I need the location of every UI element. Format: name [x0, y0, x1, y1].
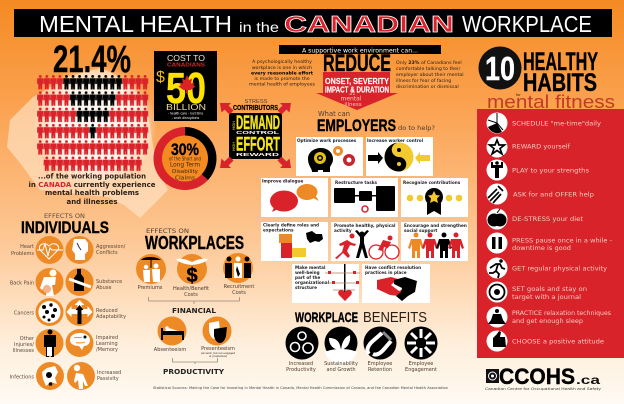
effect: aggression — [66, 236, 126, 264]
card: make mental well-being part of structure: structure — [295, 285, 317, 290]
cost box: 50 — [166, 64, 206, 113]
card: optimize work processes — [296, 137, 363, 176]
caption: working population — [28, 172, 156, 206]
reduce arrow: mental — [340, 96, 362, 102]
card: encourage social support: social support — [404, 228, 437, 233]
card: encourage social support — [401, 222, 468, 261]
caption: working population: mental health problems — [45, 189, 139, 197]
title banner — [14, 9, 612, 37]
caption: working population: ...of the working population — [38, 172, 146, 180]
text: only 23% of Canadians: illness for fear of facing — [396, 78, 451, 84]
benefit: employee engagement — [404, 326, 438, 373]
effect: cancers — [14, 298, 64, 326]
effect: substance abuse: Abuse — [96, 285, 111, 291]
habit 7: physical activity: GET regular physical activity — [512, 266, 607, 272]
effect: impaired learning: Learning — [96, 341, 118, 347]
cost box: $ — [156, 69, 165, 86]
card: make mental well-being part of structure: part of the — [295, 275, 320, 280]
stress contributors — [229, 99, 282, 159]
benefit: employee retention: Retention — [368, 367, 392, 373]
heading: effects on workplaces: WORKPLACES — [145, 233, 244, 253]
cost box: COST TO — [167, 54, 205, 63]
effect: increased passivity — [67, 362, 121, 390]
reduce arrow: illness — [344, 102, 362, 108]
heading: what can employers do to help: do to help? — [398, 125, 435, 132]
effect: cancers: Cancers — [14, 310, 34, 316]
habit 10: positive attitude: CHOOSE a positive attitude — [512, 338, 604, 346]
heading: effects on workplaces — [145, 227, 244, 253]
habit 8: set goals: SET goals and stay on — [512, 286, 587, 293]
card: restructure tasks: Restructure tasks — [335, 180, 378, 185]
heading bar: supportive environment — [279, 45, 441, 54]
text: psychologically healthy workplace: A psychologically healthy — [252, 59, 312, 65]
habit 4: ask for and offer help — [486, 184, 594, 204]
people pictogram — [37, 75, 148, 173]
title banner: MENTAL HEALTH — [39, 11, 232, 37]
habit 6: press pause — [486, 232, 612, 254]
heading: workplace benefits: BENEFITS — [363, 310, 427, 326]
heading: what can employers do to help: What can — [318, 110, 350, 118]
donut: 30% disability claims: Disability — [172, 169, 199, 175]
reduce arrow: ONSET, SEVERITY — [325, 77, 390, 86]
text: only 23% of Canadians — [396, 60, 464, 90]
card: promote healthy activity — [331, 222, 399, 261]
card: recognize contributions: Recognize contributions — [403, 180, 461, 185]
stress contributors: CONTRIBUTORS — [233, 103, 278, 112]
donut: 30% disability claims: Claims — [175, 176, 195, 182]
title banner: CANADIAN — [284, 11, 454, 37]
habit 9: practice relaxation — [486, 306, 611, 328]
panel: ten healthy habits heading: HABITS — [523, 69, 597, 97]
habit 8: set goals: target with a journal — [512, 294, 581, 301]
effect: other injuries: Injuries/ — [14, 342, 34, 348]
stress arrows — [220, 103, 291, 168]
workplace: presenteeism: or productive) — [209, 354, 227, 358]
reduce arrow: IMPACT & DURATION — [325, 86, 389, 94]
stress contributors: HIGH — [232, 121, 236, 130]
stress contributors: STRESS — [244, 99, 268, 105]
panel: habits list — [477, 109, 624, 358]
heading: effects on individuals: INDIVIDUALS — [21, 218, 109, 237]
caption: working population: and illnesses — [66, 198, 118, 206]
habit 4: ask for and offer help: ASK for and OFFER help — [513, 192, 594, 198]
workplace: health benefit costs: Costs — [184, 292, 198, 298]
habit 9: practice relaxation: and get enough sleep — [512, 318, 583, 325]
bracket: productivity — [163, 358, 225, 376]
cost box: CANADIANS — [167, 62, 206, 68]
card: clearly define roles: Clearly define roles and — [263, 222, 319, 228]
card: make mental well-being part of structure: organizational — [295, 280, 330, 285]
panel: ten healthy habits heading: for — [516, 93, 521, 97]
effect: increased passivity: Passivity — [97, 376, 119, 382]
reduce arrow: REDUCE — [323, 50, 391, 77]
heading: effects on individuals: EFFECTS ON — [44, 213, 85, 220]
heading: workplace benefits — [295, 309, 427, 326]
workplace: presenteeism: (at work, but not engaged — [201, 351, 235, 355]
bracket: productivity: PRODUCTIVITY — [163, 368, 225, 376]
title banner: in the — [239, 19, 279, 35]
text: only 23% of Canadians: comfortable talking to their — [396, 66, 460, 72]
card: increase worker control — [366, 137, 433, 176]
statistical sources: Statistical Sources: Making the Case for Investing in Mental Health in Canada, Mental Health Commission of Canada, and the Canadian Mental Health Association — [153, 386, 448, 390]
effect: increased passivity: Increased — [97, 370, 121, 376]
cost box: - health care - lost time — [168, 112, 203, 116]
stress contributors: EFFORT — [236, 134, 280, 156]
effect: reduced adaptability: Reduced — [96, 308, 118, 314]
effect: reduced adaptability: Adaptability — [96, 314, 126, 320]
text: only 23% of Canadians: Only 23% of Canadians feel — [396, 60, 462, 66]
bracket: financial — [148, 297, 240, 315]
benefit: sustainability and growth: and Growth — [326, 367, 356, 373]
reduce arrow — [316, 50, 398, 110]
effect: heart problems: Heart — [20, 244, 34, 250]
workplace: recruitment costs — [223, 253, 254, 296]
card: increase worker control: Increase worker control — [367, 138, 424, 143]
habit 2: reward yourself: REWARD yourself — [512, 144, 571, 150]
workplace: absenteeism: Absenteeism — [154, 347, 186, 353]
workplace: presenteeism: Presenteeism — [201, 346, 235, 352]
card: conflict resolution: practices in place — [365, 270, 407, 275]
card: optimize work processes: Optimize work processes — [297, 138, 357, 143]
workplace: premiums — [136, 254, 166, 291]
effect: infections — [10, 362, 64, 390]
benefit: employee engagement: Employee — [409, 361, 433, 367]
effect: heart problems: Problems — [11, 251, 34, 257]
benefit: employee engagement: Engagement — [405, 367, 437, 373]
caption: working population: in CANADA currently experience — [28, 181, 156, 189]
effect: aggression: Aggression/ — [96, 244, 126, 250]
habit 7: physical activity — [486, 258, 607, 278]
effect: back pain — [10, 268, 64, 296]
effect: other injuries — [13, 329, 64, 357]
heading bar: supportive environment: A supportive work environment can... — [302, 46, 418, 54]
effect: substance abuse: Substance — [96, 279, 122, 285]
donut: 30% disability claims: Long Term — [170, 162, 200, 168]
effect: reduced adaptability — [66, 298, 126, 326]
workplace: premiums: Premiums — [138, 285, 163, 291]
workplace: health benefit costs — [173, 254, 209, 298]
card: make mental well-being part of structure: Make mental — [295, 265, 326, 270]
CCOHS logo: CCOHS — [499, 364, 575, 389]
panel: ten healthy habits heading: 10 — [485, 50, 515, 87]
effect: other injuries: Other — [20, 336, 35, 342]
text: psychologically healthy workplace: every reasonable effort — [251, 70, 314, 76]
cost box: - work disruptions — [172, 116, 199, 120]
heading: effects on individuals — [21, 213, 109, 237]
effect: other injuries: Illnesses — [13, 348, 34, 354]
habit 5: de-stress your diet — [486, 208, 584, 230]
benefit: employee retention: Employee — [368, 361, 392, 367]
benefit: employee retention — [364, 326, 396, 373]
map of Canada background — [7, 65, 168, 218]
card: improve dialogue — [261, 178, 328, 217]
habit 3: play to your strengths: PLAY to your strengths — [512, 168, 589, 174]
card: conflict resolution: Have conflict resolution — [365, 265, 421, 270]
panel: ten healthy habits heading — [478, 46, 615, 112]
heading: workplace benefits: WORKPLACE — [295, 309, 358, 325]
effect: substance abuse — [66, 268, 122, 296]
donut: 30% disability claims: of the Short and — [169, 156, 201, 162]
habit 1: schedule me-time — [486, 112, 601, 134]
stress contributors: REWARD — [236, 152, 281, 157]
habit 9: practice relaxation: PRACTICE relaxation techniques — [512, 310, 611, 317]
heading: what can employers do to help — [317, 110, 435, 135]
statistic 21.4%: 21.4% — [53, 39, 131, 81]
card: clearly define roles: expectations — [263, 228, 294, 232]
donut: 30% disability claims: 30% — [171, 140, 199, 159]
stress contributors: DEMAND — [236, 113, 280, 134]
habit 5: de-stress your diet: DE-STRESS your diet — [512, 216, 584, 223]
heading: what can employers do to help: EMPLOYERS — [317, 116, 396, 135]
workplace: recruitment costs: Recruitment — [224, 284, 254, 290]
effect: impaired learning: /Memory — [96, 347, 118, 353]
card: encourage social support: Encourage and strengthen — [404, 223, 467, 228]
text: psychologically healthy workplace: workplace is one in which — [252, 65, 312, 71]
workplace: absenteeism — [154, 316, 186, 353]
card: promote healthy activity: Promote healthy, physical — [334, 223, 396, 228]
benefit: sustainability and growth — [324, 326, 358, 373]
habit 10: positive attitude — [486, 330, 604, 352]
stress contributors: HIGH — [232, 142, 236, 151]
card: improve dialogue: Improve dialogue — [262, 178, 303, 184]
card: make mental well-being part of structure — [292, 264, 360, 303]
CCOHS logo: Canadian Centre for Occupational Health and Safety — [485, 387, 601, 391]
habit 1: schedule me-time: SCHEDULE "me-time"daily — [512, 120, 601, 128]
text: psychologically healthy workplace: is made to promote the — [254, 76, 310, 82]
panel: ten healthy habits heading: mental fitness — [487, 91, 615, 112]
benefit: increased productivity: Increased — [289, 361, 313, 367]
stress contributors: CONTROL — [236, 130, 279, 135]
text: only 23% of Canadians: discrimination or dismissal — [396, 84, 459, 90]
effect: impaired learning: Impaired — [96, 335, 118, 341]
effect: back pain: Back Pain — [10, 280, 34, 286]
habit 3: play to your strengths — [486, 160, 589, 180]
workplace: presenteeism — [201, 316, 235, 358]
card: recognize contributions — [401, 178, 468, 217]
cost box — [154, 51, 217, 121]
habit 2: reward yourself — [486, 136, 571, 158]
workplace: health benefit costs: Health/Benefit — [173, 286, 209, 292]
card: make mental well-being part of structure: well-being — [295, 270, 320, 275]
bracket: financial: FINANCIAL — [172, 307, 217, 315]
heading: effects on workplaces: EFFECTS ON — [146, 227, 189, 235]
habit 6: press pause: downtime is good — [512, 245, 571, 252]
workplace: health benefit costs: $ — [186, 265, 198, 287]
habit 8: set goals — [486, 282, 587, 302]
title banner: WORKPLACE — [462, 11, 592, 37]
text: only 23% of Canadians: employer about their mental — [396, 72, 464, 78]
benefit: increased productivity — [286, 326, 318, 373]
effect: aggression: Conflicts — [96, 250, 118, 256]
card: clearly define roles — [261, 222, 328, 261]
CCOHS logo: .ca — [576, 373, 600, 387]
workplace: recruitment costs: Costs — [232, 290, 246, 296]
effect: infections: Infections — [10, 374, 34, 380]
benefit: increased productivity: Productivity — [286, 367, 316, 373]
cost box: BILLION — [166, 102, 206, 112]
effect: impaired learning — [66, 329, 118, 357]
donut: 30% disability claims — [154, 127, 216, 190]
CCOHS logo — [485, 364, 601, 391]
habit 6: press pause: PRESS pause once in a while - — [512, 238, 612, 244]
reduce arrow: of a — [349, 92, 355, 96]
card: promote healthy activity: activity — [334, 228, 352, 233]
text: psychologically healthy workplace — [249, 59, 315, 88]
benefit: sustainability and growth: Sustainability — [324, 361, 358, 367]
effect: heart problems — [11, 236, 64, 264]
card: conflict resolution — [362, 264, 430, 303]
text: psychologically healthy workplace: mental health of employees — [249, 82, 315, 88]
card: restructure tasks — [331, 178, 398, 217]
